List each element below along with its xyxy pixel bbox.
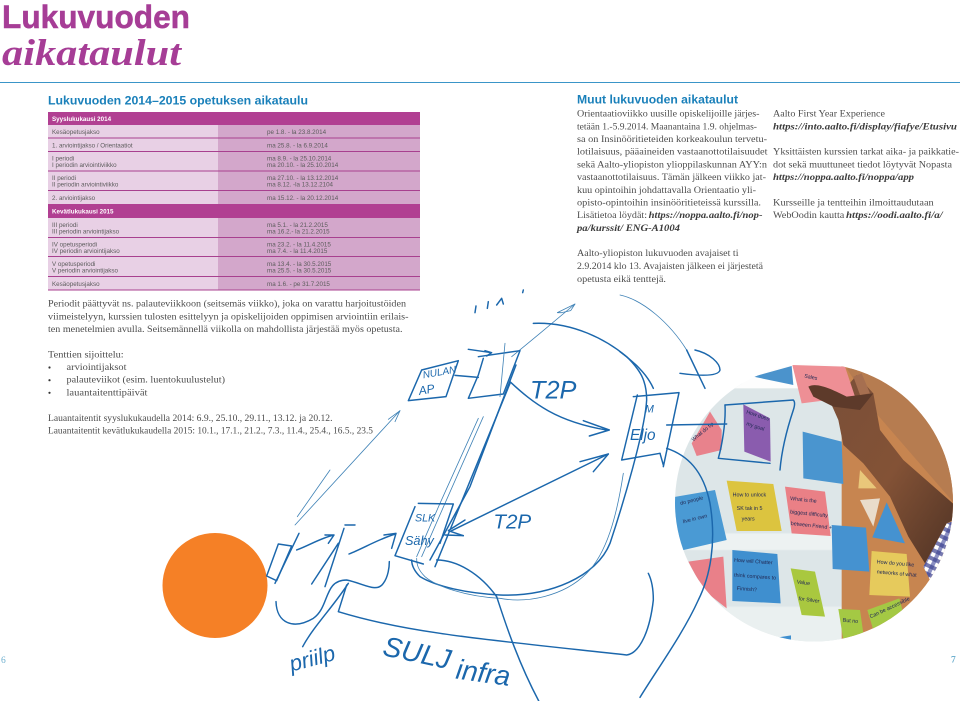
photo: sticky notes circle: But no (842, 618, 858, 625)
photo: sticky notes circle: How will Chatter (734, 558, 773, 566)
sketch: lines over the photo (640, 400, 795, 697)
panel: schedule table: 1. arviointijakso / Orientaatiot (52, 142, 133, 150)
page number right: 7 (951, 656, 956, 666)
text block: orientation week: sekä Aalto-yliopiston ylioppilaskunnan AYY:n (577, 159, 767, 170)
sketch: T2P double arrow (448, 454, 608, 536)
panel: schedule table: ma 25.8. - la 6.9.2014 (267, 142, 328, 150)
panel: schedule table: ma 27.10. - la 13.12.2014 (267, 175, 339, 182)
text block: orientation week: lotilaisuus, pääaineiden vastaanottotilaisuudet (577, 147, 768, 158)
text block: opening ceremony: 2.9.2014 klo 13. Avajaisten jälkeen ei järjestetä (577, 261, 764, 272)
panel: schedule table: ma 1.6. - pe 31.7.2015 (267, 281, 330, 288)
text block: periods note: ten menetelmien avulla. Seitsemännellä viikolla on mahdollista järjestää myös opetusta. (48, 324, 402, 335)
panel: schedule table: ma 5.1. - la 21.2.2015 (267, 222, 328, 229)
photo: sticky notes circle: How to unlock (733, 493, 766, 499)
panel: schedule table: III periodi (52, 222, 78, 229)
photo: sticky notes circle: biggest difficulty (790, 509, 828, 519)
panel: schedule table: Kevätlukukausi 2015 (52, 208, 114, 216)
text block: links column: Yksittäisten kurssien tarkat aika- ja paikkatie- (773, 147, 959, 158)
photo: sticky notes circle: Can be accessible (869, 596, 911, 620)
sketch: SULJ infra line (338, 560, 653, 701)
heading: schedule table: Lukuvuoden 2014–2015 opetuksen aikataulu (48, 94, 308, 108)
sketch: T2P double arrow: T2P (493, 510, 531, 533)
text block: links column: Kursseille ja tentteihin ilmoittaudutaan (773, 198, 934, 208)
panel: schedule table: 2. arviointijakso (52, 195, 96, 202)
sketch: T2P upper arrow: T2P (530, 376, 577, 404)
sketch: right box: Eljo (630, 427, 656, 444)
photo: sticky notes circle (667, 360, 960, 647)
title: Lukuvuoden (2, 0, 190, 35)
heading: other schedules: Muut lukuvuoden aikataulut (577, 92, 738, 106)
panel: schedule table: ma 25.5. - la 30.5.2015 (267, 268, 332, 274)
panel: schedule table: ma 13.4. - la 30.5.2015 (267, 261, 332, 268)
sketch: SULJ infra line: SULJ (380, 631, 455, 675)
sketch: NULAN AP box: NULAN (422, 364, 458, 381)
panel: schedule table: Kesäopetusjakso (52, 281, 100, 288)
photo: sticky notes circle: Finnish? (737, 586, 757, 593)
page number left: 6 (1, 656, 6, 666)
photo: sticky notes circle: How does (745, 410, 770, 423)
text block: links column: dot sekä muuttuneet tiedot löytyvät Nopasta (773, 159, 953, 170)
text block: orientation week: kuu opintoihin johdattavalla Orientaatio yli- (577, 185, 756, 196)
text block: orientation week: opisto-opintoihin insinööritieteissä kurssilla. (577, 198, 761, 208)
panel: schedule table: II periodi (52, 175, 76, 182)
photo: sticky notes circle: live in own (682, 513, 708, 525)
photo: sticky notes circle: Sales (804, 373, 818, 382)
photo: sticky notes circle: my goal (745, 421, 765, 433)
sketch: left chain of boxes and arrows (267, 411, 463, 587)
sketch: top marks and thin arrow (475, 290, 575, 357)
sketch: hand-drawn blue diagram (267, 290, 795, 701)
sketch: wavy line and priilp: priilp (286, 640, 338, 677)
photo: sticky notes circle: years (742, 517, 755, 523)
text block: orientation week: https://noppa.aalto.fi/nop- (649, 210, 762, 221)
photo: sticky notes circle: Value (796, 579, 810, 587)
text block: orientation week (576, 108, 768, 234)
panel: schedule table: ma 8.9. - la 25.10.2014 (267, 156, 332, 162)
photo: sticky notes circle: What do tip (691, 421, 715, 443)
panel: schedule table: Kesäopetusjakso (52, 129, 100, 136)
text block: periods note: Periodit päättyvät ns. palauteviikkoon (seitsemäs viikko), joka on varattu harjoitustöiden (48, 299, 406, 310)
panel: schedule table: pe 1.8. - la 23.8.2014 (267, 129, 327, 136)
panel: schedule table: V periodin arviointijakso (52, 268, 119, 274)
decoration: orange circle (162, 533, 268, 638)
text block: orientation week: Lisätietoa löydät: (577, 210, 647, 221)
sketch: right box (622, 393, 679, 467)
panel: schedule table: I periodin arviointiviikko (52, 162, 117, 169)
title (2, 0, 190, 74)
text block: links column: https://noppa.aalto.fi/noppa/app (773, 172, 914, 183)
panel: schedule table: III periodin arviointijakso (52, 228, 120, 236)
panel: schedule table: ma 23.2. - la 11.4.2015 (267, 242, 331, 248)
text block: opening ceremony: opetusta eikä tenttejä. (577, 274, 666, 285)
panel: schedule table: I periodi (52, 156, 74, 162)
panel: schedule table: II periodin arviointiviikko (52, 182, 119, 188)
panel: schedule table: V opetusperiodi (52, 261, 95, 268)
text block: links column: https://oodi.aalto.fi/a/ (846, 210, 944, 221)
text block: Saturday exams: Lauantaitentit kevätlukukaudella 2015: 10.1., 17.1., 21.2., 7.3., 11.4., 25.4., 16.5., 23.5 (48, 426, 373, 437)
text block: periods note: viimeistelyyn, kurssien tulosten esittelyyn ja opiskelijoiden oppimisen arviointiin erilais- (48, 311, 408, 322)
text block: exam placement list: Tenttien sijoittelu: (48, 349, 124, 360)
text block: orientation week: Orientaatioviikko uusille opiskelijoille järjes- (577, 108, 760, 120)
panel: schedule table: ma 8.12. -la 13.12.2104 (267, 182, 334, 188)
text block: opening ceremony: Aalto-yliopiston lukuvuoden avajaiset ti (577, 248, 739, 259)
sketch: right box: M (645, 404, 654, 416)
sketch: SULJ infra line: infra (454, 654, 512, 692)
text block: exam placement list (48, 349, 225, 398)
sketch: NULAN AP box: AP (416, 381, 436, 398)
text block: links column: https://into.aalto.fi/display/fiafye/Etusivu (773, 121, 958, 132)
sketch: upper box and long parallel channel (417, 343, 520, 567)
text block: exam placement list: palauteviikot (esim. luentokuulustelut) (66, 375, 225, 386)
text block: opening ceremony (577, 248, 764, 285)
sketch: T2P upper arrow (510, 376, 609, 436)
title: aikataulut (2, 33, 183, 74)
photo: sticky notes circle: think compares to (734, 573, 776, 582)
panel: schedule table: ma 16.2.- la 21.2.2015 (267, 228, 330, 236)
panel: schedule table: IV periodin arviointijakso (52, 248, 120, 255)
sketch: left chain of boxes and arrows: SLK (415, 513, 436, 525)
text block: Saturday exams (48, 413, 373, 437)
text block: orientation week: sa on Insinööritieteiden korkeakoulun tervetu- (577, 134, 767, 145)
photo: sticky notes circle: between Friend + (790, 521, 832, 531)
photo: sticky notes circle: networks of what (876, 569, 917, 579)
panel: schedule table: ma 15.12. - la 20.12.2014 (267, 195, 339, 202)
panel: schedule table (48, 112, 420, 290)
text block: links column: Aalto First Year Experience (773, 108, 885, 120)
photo: sticky notes circle: for Silver (798, 596, 820, 605)
text block: orientation week: vastaanottotilaisuus. Tämän jälkeen viikko jat- (577, 172, 766, 183)
panel: schedule table: ma 7.4. - la 11.4.2015 (267, 248, 328, 255)
panel: schedule table: ma 20.10. - la 25.10.2014 (267, 162, 339, 169)
sketch: NULAN AP box (408, 361, 478, 401)
photo: sticky notes circle: What is the (790, 496, 817, 505)
sketch: wavy line and priilp (276, 562, 389, 677)
text block: orientation week: pa/kurssit/ ENG-A1004 (576, 223, 680, 234)
panel: schedule table: Syyslukukausi 2014 (52, 116, 112, 123)
text block: links column (773, 108, 959, 221)
photo: sticky notes circle: do people (680, 495, 704, 507)
text block: Saturday exams: Lauantaitentit syyslukukaudella 2014: 6.9., 25.10., 29.11., 13.12. ja 20.12. (48, 413, 332, 424)
text block: exam placement list: arviointijaksot (66, 362, 127, 373)
photo: sticky notes circle: SK tak in 5 (737, 506, 762, 512)
text block: orientation week: tetään 1.-5.9.2014. Maanantaina 1.9. ohjelmas- (577, 121, 757, 132)
sketch: long return curves (412, 295, 720, 600)
text block: links column: WebOodin kautta (773, 210, 845, 221)
photo: sticky notes circle: How do you like (876, 559, 915, 569)
text block: exam placement list: lauantaitenttipäivät (66, 387, 148, 398)
text block: periods note (48, 299, 408, 335)
sketch: left chain of boxes and arrows: Sähy (405, 534, 435, 548)
panel: schedule table: IV opetusperiodi (52, 242, 97, 248)
